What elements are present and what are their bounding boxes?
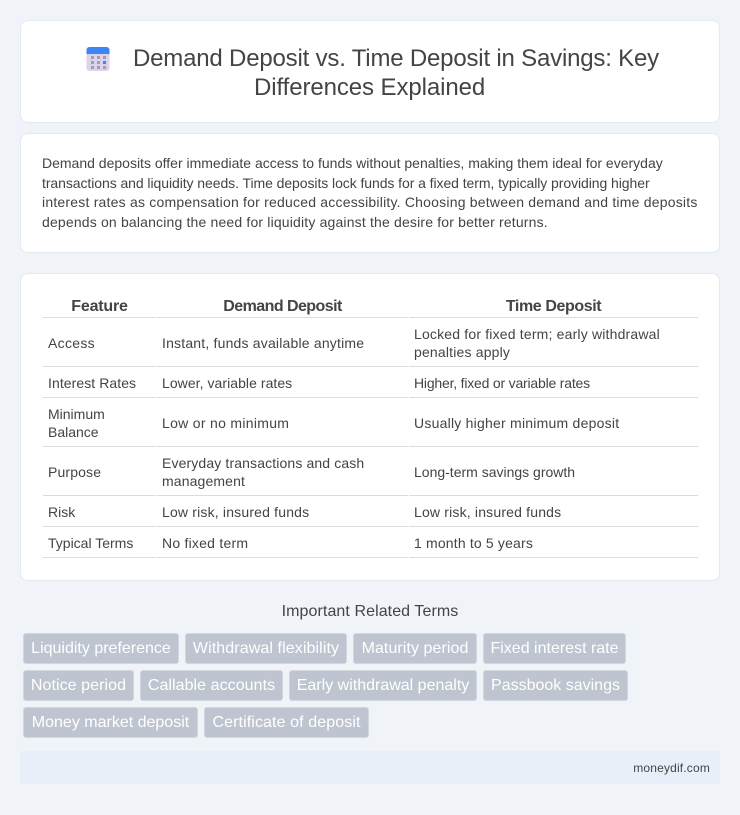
intro text panel (20, 133, 720, 253)
row: minimum balance: Usually higher minimum deposit (414, 415, 619, 431)
row: access: penalties apply (414, 344, 510, 360)
intro paragraph: depends on balancing the need for liquidity against the desire for better returns. (42, 214, 548, 230)
row: risk (48, 504, 561, 520)
tag: Liquidity preference (31, 640, 171, 657)
table header (71, 298, 602, 315)
row: minimum balance: Low or no minimum (162, 415, 289, 431)
header card (20, 20, 720, 123)
tag: Withdrawal flexibility (193, 640, 339, 657)
tag (204, 707, 369, 738)
row: purpose: Long-term savings growth (414, 464, 575, 480)
comparison table panel (20, 273, 720, 581)
tag: Maturity period (362, 640, 468, 657)
tag (23, 707, 198, 738)
row: risk: Low risk, insured funds (414, 504, 561, 520)
tag: Passbook savings (491, 677, 620, 694)
footer bar (20, 751, 720, 784)
tag (483, 633, 626, 664)
intro paragraph: transactions and liquidity needs. Time deposits lock funds for a fixed term, typically providing higher (42, 175, 650, 191)
related terms heading: Important Related Terms (282, 603, 458, 620)
tag: Fixed interest rate (490, 640, 619, 657)
row: interest rates: Higher, fixed or variable rates (414, 375, 590, 391)
row: minimum balance: Balance (48, 424, 99, 440)
row: access (48, 326, 660, 360)
row: minimum balance: Minimum (48, 406, 105, 422)
tag: Money market deposit (32, 714, 189, 731)
intro paragraph: interest rates as compensation for reduced accessibility. Choosing between demand and time deposits (42, 194, 698, 210)
row: interest rates: Interest Rates (48, 375, 136, 391)
table header: Feature (71, 298, 128, 315)
tag: Notice period (31, 677, 126, 694)
intro paragraph: Demand deposits offer immediate access to funds without penalties, making them ideal for everyday (42, 155, 663, 171)
row: typical terms: No fixed term (162, 535, 248, 551)
table header: Time Deposit (506, 298, 601, 315)
icon: calendar (86, 47, 110, 71)
row: purpose: Everyday transactions and cash (162, 455, 364, 471)
footer source: moneydif.com (633, 761, 710, 775)
row: access: Instant, funds available anytime (162, 335, 364, 351)
row: purpose (48, 455, 575, 489)
title: Differences Explained (254, 74, 485, 101)
title: Demand Deposit vs. Time Deposit in Savings: Key (133, 45, 659, 72)
row: typical terms (48, 535, 533, 551)
tag (353, 633, 477, 664)
tag (483, 670, 628, 701)
row: risk: Low risk, insured funds (162, 504, 309, 520)
row: typical terms: 1 month to 5 years (414, 535, 533, 551)
table header: Demand Deposit (223, 298, 342, 315)
tag (23, 633, 179, 664)
title (133, 45, 659, 101)
row: risk: Risk (48, 504, 75, 520)
row: purpose: Purpose (48, 464, 101, 480)
tag (23, 670, 134, 701)
row: minimum balance (48, 406, 620, 440)
tag: Callable accounts (148, 677, 275, 694)
row: purpose: management (162, 473, 245, 489)
row: typical terms: Typical Terms (48, 535, 133, 551)
tag (140, 670, 283, 701)
tag (289, 670, 477, 701)
related terms tags (23, 633, 628, 738)
tag (185, 633, 347, 664)
tag: Certificate of deposit (212, 714, 361, 731)
intro paragraph (42, 155, 698, 230)
row: interest rates: Lower, variable rates (162, 375, 292, 391)
row: access: Locked for fixed term; early withdrawal (414, 326, 660, 342)
tag: Early withdrawal penalty (297, 677, 469, 694)
row: access: Access (48, 335, 95, 351)
row: interest rates (48, 375, 590, 391)
